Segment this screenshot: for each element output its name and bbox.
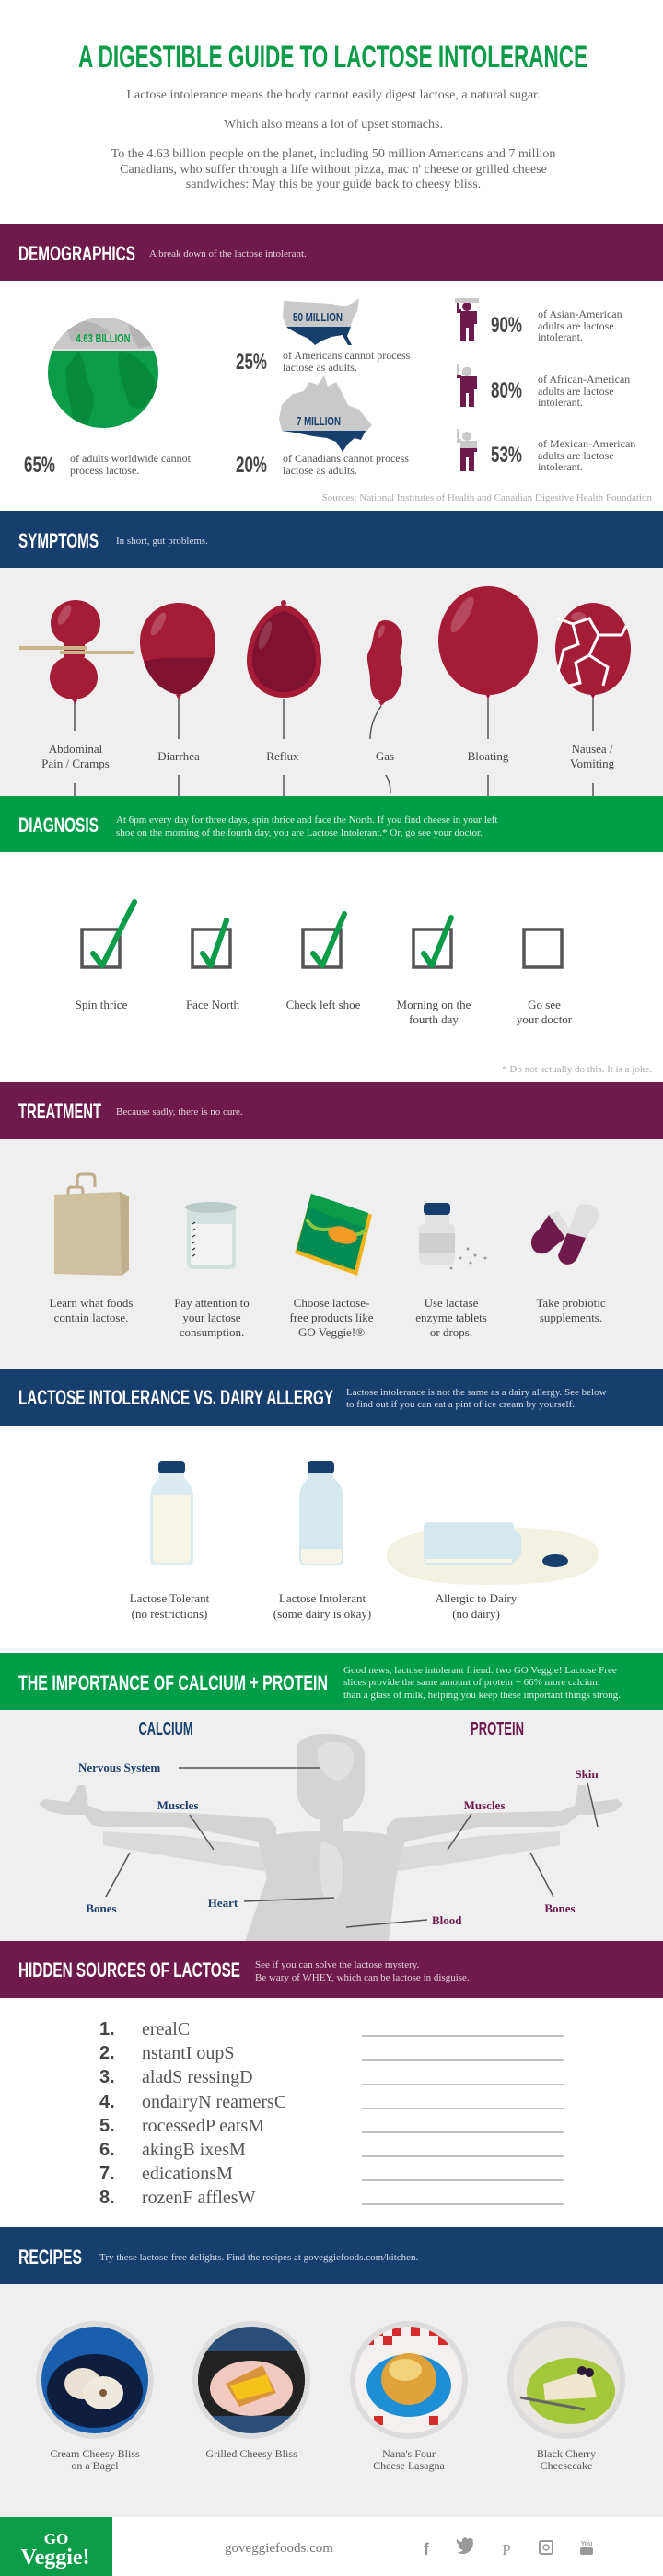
icon: globe: 4.63 BILLION xyxy=(76,331,131,345)
panel: diagnosis checklist: Face North xyxy=(186,998,240,1011)
section header: hidden sources: HIDDEN SOURCES OF LACTOSE xyxy=(18,1958,240,1981)
stat: 25% xyxy=(236,349,411,375)
symptom labels: Abdominal xyxy=(49,742,103,756)
stat: 90% Asian-American: intolerant. xyxy=(538,330,583,343)
stat: 53% Mexican-American: of Mexican-American xyxy=(538,437,635,450)
section header: hidden sources xyxy=(0,1941,663,1998)
panel: symptoms xyxy=(0,568,663,796)
intro text: Lactose intolerance means the body cannot easily digest lactose, a natural sugar. xyxy=(126,88,541,102)
intro text: To the 4.63 billion people on the planet, including 50 million Americans and 7 million xyxy=(111,147,555,161)
treatment labels: consumption. xyxy=(180,1325,244,1339)
panel: word scramble list: 3. xyxy=(99,2067,115,2087)
icon: measuring beaker xyxy=(185,1202,237,1269)
panel: milk bottles comparison: Allergic to Dairy xyxy=(436,1591,518,1605)
panel: diagnosis checklist: your doctor xyxy=(517,1012,573,1026)
symptom labels: Diarrhea xyxy=(157,749,200,763)
panel: treatment xyxy=(0,1139,663,1369)
panel: recipes xyxy=(0,2284,663,2517)
stat: 53% Mexican-American: intolerant. xyxy=(538,460,583,473)
stat: 20% xyxy=(236,452,409,478)
section header: symptoms xyxy=(0,511,663,568)
stat: 53% Mexican-American: 53% xyxy=(491,443,522,468)
section header: hidden sources: See if you can solve the lactose mystery. xyxy=(255,1959,420,1970)
panel: diagnosis checklist: * Do not actually do this. It is a joke. xyxy=(502,1064,652,1075)
recipe: cheesecake: Cheesecake xyxy=(541,2459,592,2472)
stat: 65% xyxy=(24,452,192,478)
body silhouette xyxy=(39,1734,622,1941)
stat: 90% Asian-American: adults are lactose xyxy=(538,319,614,332)
panel: body diagram xyxy=(0,1710,663,1941)
panel: word scramble list: aladS ressingD xyxy=(142,2067,253,2087)
icon: partly filled bottle xyxy=(299,1461,343,1565)
stat: 25%: of Americans cannot process xyxy=(283,349,411,362)
treatment labels: GO Veggie!® xyxy=(298,1325,365,1339)
recipe: bagel: Cream Cheesy Bliss xyxy=(50,2447,140,2460)
icon: balloon reflux xyxy=(247,600,321,698)
treatment labels: or drops. xyxy=(430,1325,472,1339)
stat: 90% Asian-American: of Asian-American xyxy=(538,307,622,320)
section header: recipes: Try these lactose-free delights. Find the recipes at goveggiefoods.com/kitchen. xyxy=(99,2252,419,2263)
panel: demographics xyxy=(24,298,652,503)
treatment labels: Pay attention to xyxy=(174,1296,250,1310)
panel: body diagram: CALCIUM xyxy=(138,1719,193,1739)
panel: word scramble list: ondairyN reamersC xyxy=(142,2092,286,2112)
panel: diagnosis checklist xyxy=(76,902,652,1075)
stat: 53% Mexican-American: adults are lactose xyxy=(538,449,614,462)
section header: diagnosis: shoe on the morning of the fourth day, you are Lactose Intolerant.* Or, go see your doctor. xyxy=(116,827,483,838)
icon: spilled bottle xyxy=(387,1522,599,1585)
icon: full milk bottle xyxy=(150,1461,193,1565)
section header: calcium + protein: slices provide the same amount of protein + 66% more calcium xyxy=(343,1677,600,1688)
panel: milk bottles comparison: (some dairy is okay) xyxy=(273,1607,371,1621)
panel: word scramble list xyxy=(99,2019,564,2208)
section header: calcium + protein: THE IMPORTANCE OF CALCIUM + PROTEIN xyxy=(18,1671,328,1694)
section header: demographics xyxy=(0,224,663,281)
panel: body diagram: Nervous System xyxy=(78,1761,160,1774)
icon: USA map xyxy=(283,298,359,345)
panel: word scramble list: 2. xyxy=(99,2043,115,2063)
treatment labels xyxy=(50,1296,606,1339)
panel: word scramble list: erealC xyxy=(142,2019,190,2039)
recipe: lasagna xyxy=(350,2319,470,2472)
intro text: sandwiches: May this be your guide back to cheesy bliss. xyxy=(186,178,481,191)
icon: USA map: 50 MILLION xyxy=(293,310,343,324)
section header: calcium + protein xyxy=(0,1653,663,1710)
treatment labels: your lactose xyxy=(182,1311,241,1324)
section header: calcium + protein: Good news, lactose intolerant friend: two GO Veggie! Lactose Free xyxy=(343,1665,617,1676)
stat: 20%: of Canadians cannot process xyxy=(283,452,409,465)
social icons: You xyxy=(581,2541,592,2547)
panel: milk bottles comparison xyxy=(130,1461,599,1621)
stat: 80% African-American xyxy=(457,364,630,409)
recipe: bagel xyxy=(36,2319,157,2472)
recipe: grilled cheese: Grilled Cheesy Bliss xyxy=(205,2447,297,2460)
section header: lactose intolerance vs dairy allergy: to find out if you can eat a pint of ice cream by yourself. xyxy=(346,1399,575,1410)
sources: Sources: National Institutes of Health and Canadian Digestive Health Foundation xyxy=(322,492,652,503)
treatment labels: supplements. xyxy=(540,1311,602,1324)
logo: GO Veggie: Veggie! xyxy=(20,2546,90,2570)
stat: 65%: of adults worldwide cannot xyxy=(70,452,192,465)
panel: body diagram: Muscles xyxy=(157,1798,198,1812)
section header: lactose intolerance vs dairy allergy: LACTOSE INTOLERANCE VS. DAIRY ALLERGY xyxy=(18,1386,333,1409)
panel: diagnosis checklist: fourth day xyxy=(409,1012,459,1026)
stat: 25%: 25% xyxy=(236,350,267,375)
symptom labels: Nausea / xyxy=(571,742,613,756)
icon: Canada map xyxy=(279,375,372,452)
intro text: Which also means a lot of upset stomachs. xyxy=(224,118,443,132)
recipe: bagel: on a Bagel xyxy=(71,2459,119,2472)
panel: word scramble list: 8. xyxy=(99,2188,115,2208)
recipe: cheesecake: Black Cherry xyxy=(537,2447,596,2460)
icon: balloon bloating xyxy=(438,586,538,699)
section header: lactose intolerance vs dairy allergy xyxy=(0,1369,663,1426)
treatment labels: free products like xyxy=(290,1311,374,1324)
footer xyxy=(0,2517,593,2576)
icon: GO Veggie package xyxy=(295,1194,372,1276)
section header: recipes: RECIPES xyxy=(18,2246,82,2269)
panel: diagnosis checklist: Spin thrice xyxy=(76,998,128,1011)
panel: word scramble list: 6. xyxy=(99,2140,115,2160)
panel: word scramble list: nstantI oupS xyxy=(142,2043,235,2063)
panel: body diagram: Blood xyxy=(432,1913,462,1927)
panel: diagnosis checklist: Morning on the xyxy=(397,998,471,1011)
icon: Canada map: 7 MILLION xyxy=(297,414,341,428)
logo: GO Veggie xyxy=(0,2517,112,2576)
section header: diagnosis: At 6pm every day for three days, spin thrice and face the North. If you find cheese in your left xyxy=(116,814,497,826)
symptom labels: Reflux xyxy=(266,749,299,763)
stat: 65%: 65% xyxy=(24,453,55,478)
stat: 80% African-American: 80% xyxy=(491,378,522,403)
stat: 20%: lactose as adults. xyxy=(283,464,357,477)
section header: treatment xyxy=(0,1082,663,1139)
panel: diagnosis checklist: Check left shoe xyxy=(286,998,361,1011)
panel: diagnosis checklist: Go see xyxy=(528,998,561,1011)
panel: body diagram: Muscles xyxy=(464,1798,505,1812)
stat: 20%: 20% xyxy=(236,453,267,478)
panel: word scramble list: 7. xyxy=(99,2164,115,2184)
symptom labels xyxy=(41,742,615,770)
stat: 90% Asian-American xyxy=(455,298,622,343)
stat: 25%: lactose as adults. xyxy=(283,361,357,374)
section header: calcium + protein: than a glass of milk, helping you keep these important things strong. xyxy=(343,1690,621,1701)
panel: word scramble list: 1. xyxy=(99,2019,115,2039)
panel: body diagram: Bones xyxy=(544,1901,576,1915)
panel: word scramble list: 5. xyxy=(99,2116,115,2136)
section header: diagnosis xyxy=(0,796,663,852)
icon: globe xyxy=(48,318,158,428)
treatment labels: Learn what foods xyxy=(50,1296,133,1310)
recipe: grilled cheese xyxy=(192,2319,313,2460)
panel: milk bottles comparison: Lactose Intolerant xyxy=(279,1591,366,1605)
stat: 80% African-American: intolerant. xyxy=(538,396,583,409)
panel: milk bottles comparison: (no restrictions) xyxy=(132,1607,207,1621)
section header: treatment: TREATMENT xyxy=(18,1100,101,1123)
icon: balloon abdominal pain xyxy=(19,600,134,704)
section header: demographics: A break down of the lactose intolerant. xyxy=(149,248,307,260)
stat: 80% African-American: adults are lactose xyxy=(538,385,614,398)
section header: treatment: Because sadly, there is no cure. xyxy=(116,1106,243,1117)
treatment labels: enzyme tablets xyxy=(415,1311,487,1324)
social icons xyxy=(424,2537,593,2559)
icon: balloon nausea xyxy=(555,603,631,699)
social icons: P xyxy=(502,2541,511,2559)
logo: GO Veggie: GO xyxy=(44,2530,68,2547)
stat: 90% Asian-American: 90% xyxy=(491,313,522,338)
panel: word scramble list: akingB ixesM xyxy=(142,2140,246,2160)
recipe: cheesecake xyxy=(506,2319,626,2472)
stat: 65%: process lactose. xyxy=(70,464,139,477)
icon: pill bottle xyxy=(419,1203,486,1270)
panel: body diagram: Skin xyxy=(575,1767,599,1781)
panel: milk bottles comparison: (no dairy) xyxy=(452,1607,500,1621)
icon: paper bag xyxy=(54,1174,129,1276)
icon: balloon diarrhea xyxy=(140,603,215,699)
symptom labels: Gas xyxy=(376,749,394,763)
panel: body diagram: Bones xyxy=(86,1901,117,1915)
panel: word scramble list: edicationsM xyxy=(142,2164,233,2184)
section header: lactose intolerance vs dairy allergy: Lactose intolerance is not the same as a dairy allergy. See below xyxy=(346,1387,607,1398)
symptom labels: Bloating xyxy=(468,749,509,763)
recipe: lasagna: Cheese Lasagna xyxy=(373,2459,445,2472)
recipe: lasagna: Nana's Four xyxy=(382,2447,436,2460)
intro text: Canadians, who suffer through a life without pizza, mac n' cheese or grilled cheese xyxy=(120,163,547,177)
section header: symptoms: SYMPTOMS xyxy=(18,529,99,552)
icon: probiotic capsules xyxy=(531,1204,599,1265)
section header: hidden sources: Be wary of WHEY, which can be lactose in disguise. xyxy=(255,1972,470,1983)
symptom labels: Pain / Cramps xyxy=(41,757,110,770)
icon: balloon gas xyxy=(367,620,402,706)
panel: word scramble list: rozenF afflesW xyxy=(142,2188,256,2208)
social icons: f xyxy=(424,2540,430,2559)
panel: body diagram: PROTEIN xyxy=(471,1719,524,1739)
treatment labels: Use lactase xyxy=(425,1296,479,1310)
intro text xyxy=(111,88,555,191)
treatment labels: contain lactose. xyxy=(54,1311,128,1324)
section header: recipes xyxy=(0,2227,663,2284)
symptom labels: Vomiting xyxy=(570,757,615,770)
stat: 53% Mexican-American xyxy=(457,429,635,473)
panel: word scramble list: rocessedP eatsM xyxy=(142,2116,264,2136)
section header: diagnosis: DIAGNOSIS xyxy=(18,814,99,837)
treatment labels: Choose lactose- xyxy=(294,1296,369,1310)
panel: body diagram: Heart xyxy=(208,1896,238,1910)
panel: word scramble list: 4. xyxy=(99,2092,115,2112)
section header: symptoms: In short, gut problems. xyxy=(116,536,208,547)
panel: milk bottles comparison: Lactose Tolerant xyxy=(130,1591,210,1605)
footer: goveggiefoods.com xyxy=(225,2541,333,2556)
stat: 80% African-American: of African-American xyxy=(538,373,630,386)
section header: demographics: DEMOGRAPHICS xyxy=(18,242,135,265)
treatment labels: Take probiotic xyxy=(536,1296,606,1310)
